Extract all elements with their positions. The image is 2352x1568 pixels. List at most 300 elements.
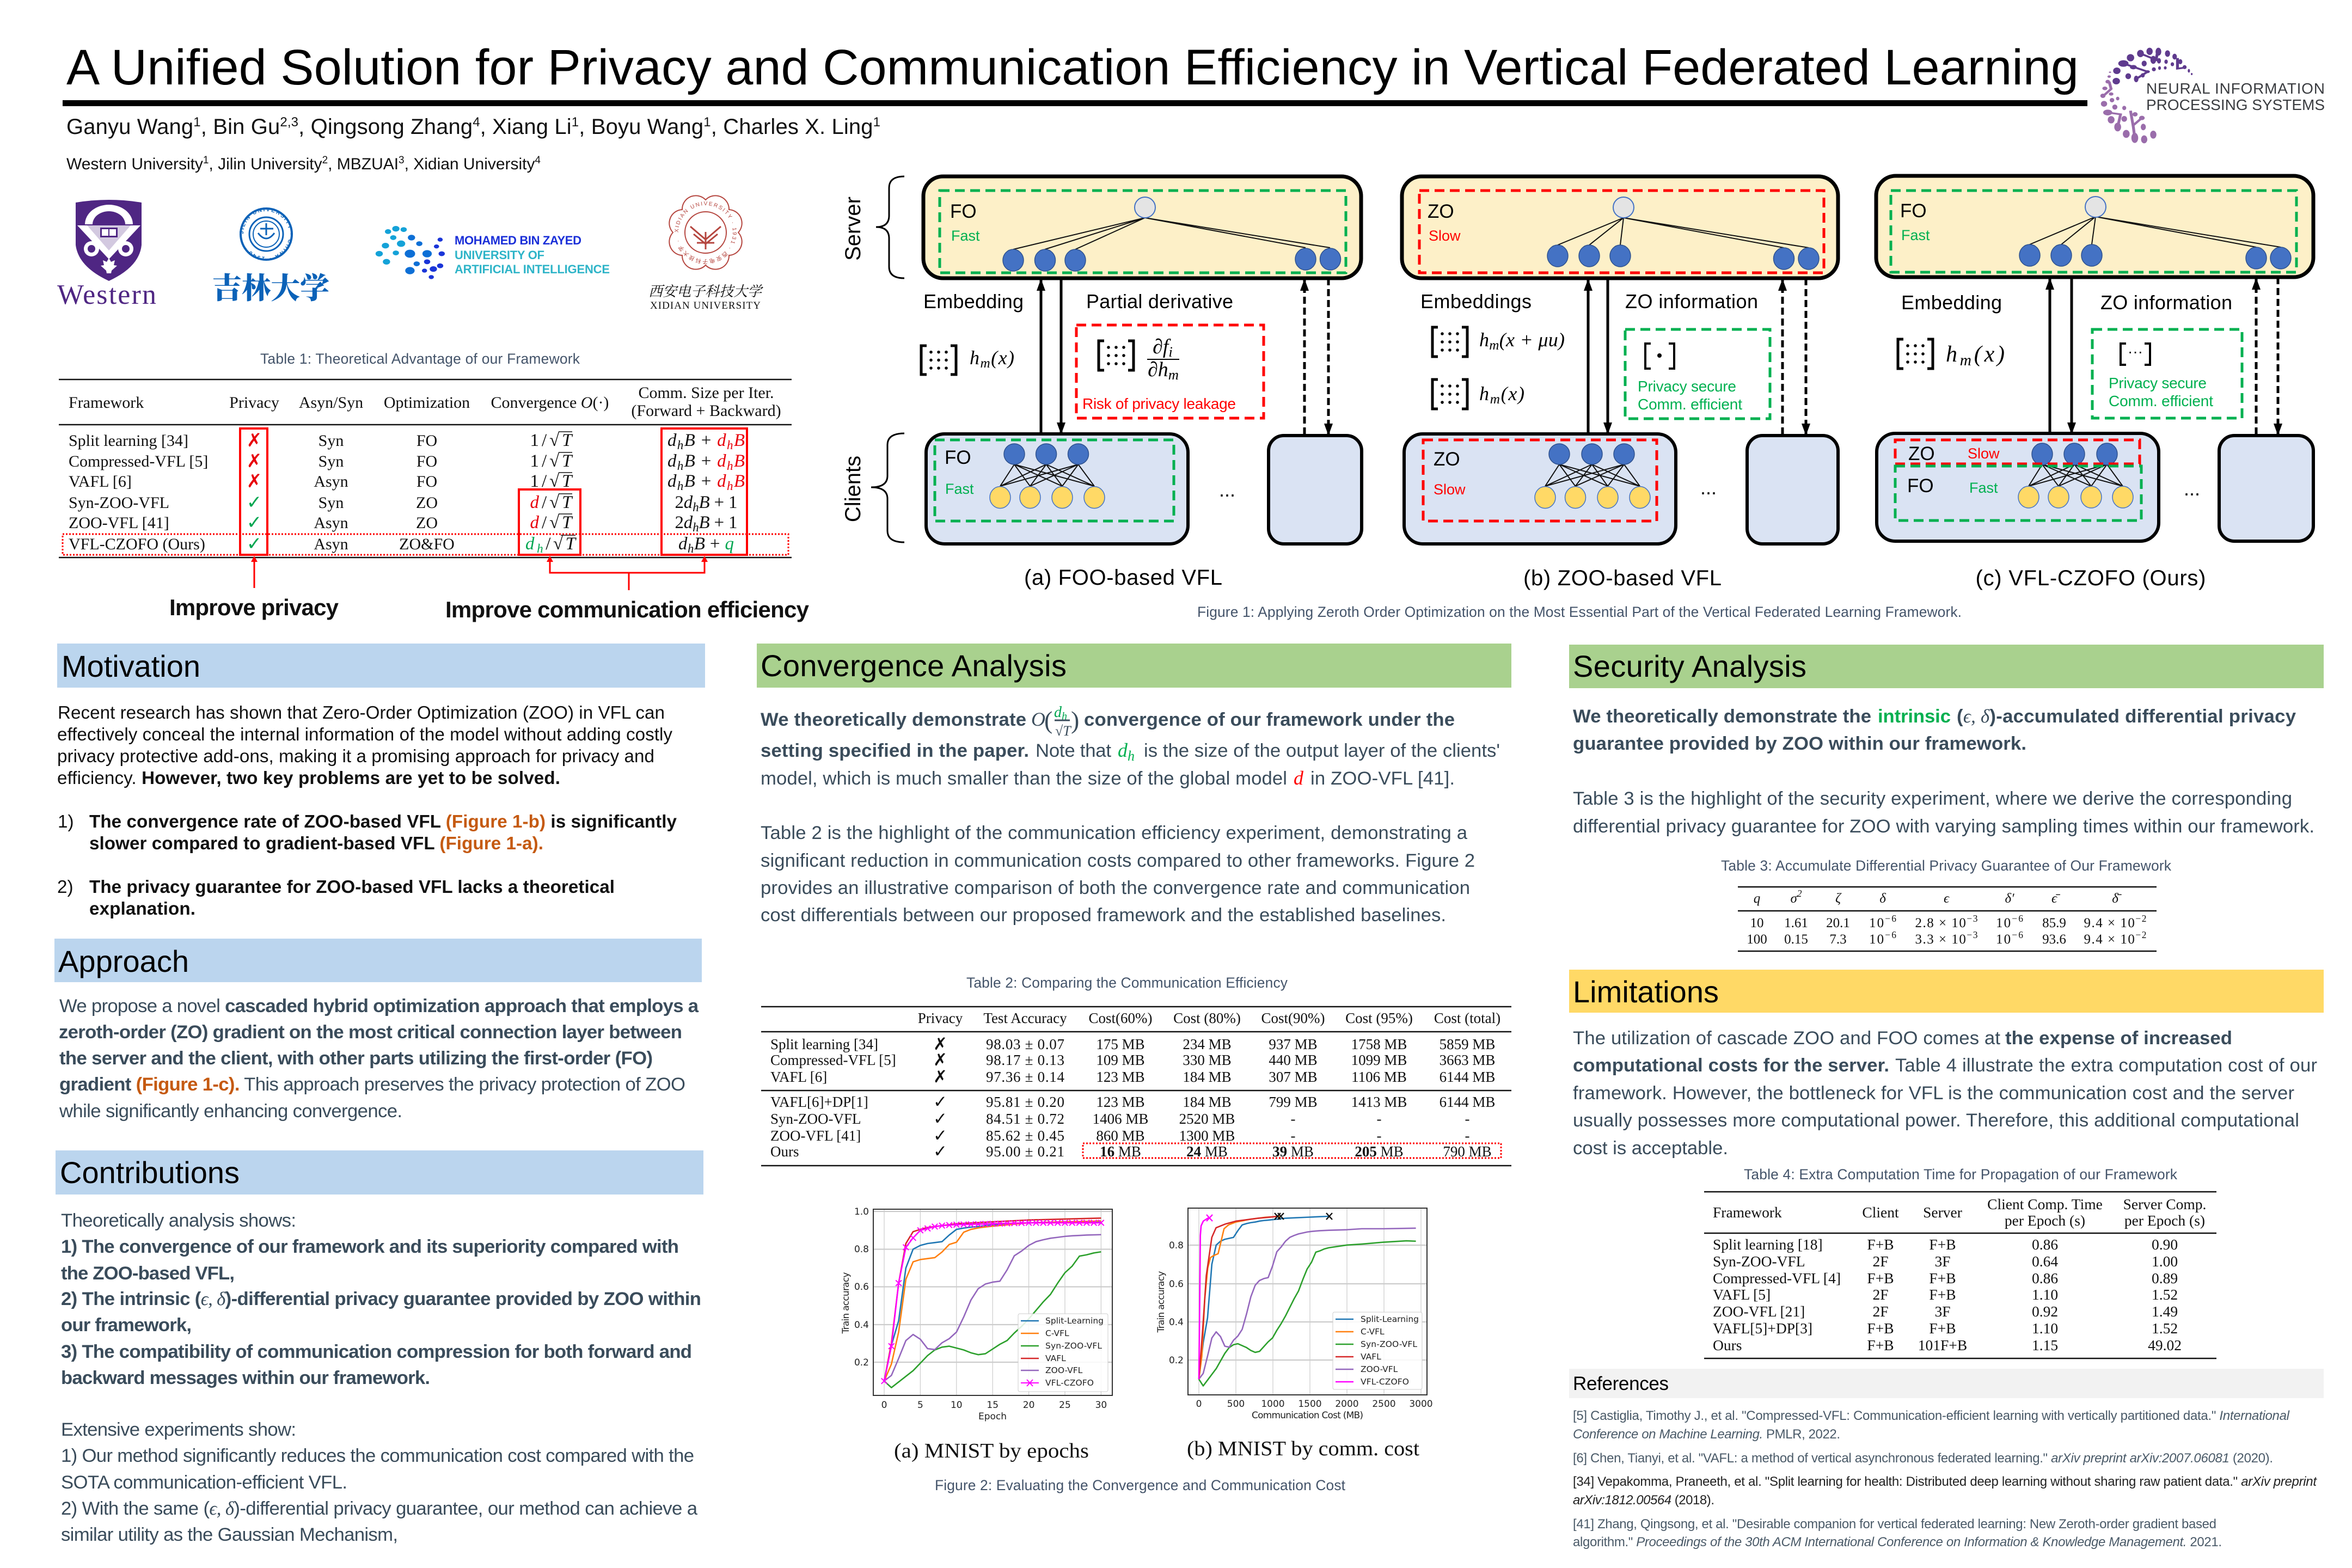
table 1 cells: Asyn bbox=[314, 535, 348, 553]
table 4 cells: per Epoch (s) bbox=[2124, 1212, 2205, 1229]
table 1 cells: B bbox=[734, 451, 745, 471]
table 2 caption: Table 2: Comparing the Communication Efficiency bbox=[966, 975, 1288, 991]
contributions text: 1) The convergence of our framework and its superiority compared with bbox=[61, 1236, 679, 1257]
diagram c: VFL-CZOFO: ZO information bbox=[2100, 291, 2232, 314]
panel: contributions bbox=[56, 1150, 703, 1545]
contributions text: the ZOO-based VFL, bbox=[61, 1263, 235, 1284]
table 1 cells: 1/√T bbox=[530, 471, 573, 491]
diagram b: ZOO-based VFL: m bbox=[1489, 338, 1499, 353]
affiliations: 1 bbox=[203, 155, 209, 166]
authors: , Qingsong Zhang bbox=[298, 115, 473, 139]
table 1 cells: Framework bbox=[69, 394, 144, 412]
diagram a: FOO-based VFL: ∂f bbox=[1153, 335, 1168, 358]
plot b axes text: 0 bbox=[1196, 1399, 1202, 1410]
embedding matrix c bbox=[1898, 339, 1933, 369]
approach text: the server and the client, with other parts utilizing the first-order (FO) bbox=[59, 1048, 653, 1069]
MBZUAI wordmark: ARTIFICIAL INTELLIGENCE bbox=[455, 262, 610, 276]
convergence statement: d bbox=[1294, 767, 1304, 789]
table 3 caption: Table 3: Accumulate Differential Privacy Guarantee of Our Framework bbox=[1721, 857, 2172, 874]
approach text: gradient (Figure 1-c). This approach preserves the privacy protection of ZOO bbox=[59, 1074, 685, 1095]
reference list: [6] Chen, Tianyi, et al. "VAFL: a method of vertical asynchronous federated learning." arXiv preprint arXiv:2007.06081 (2020). bbox=[1573, 1451, 2273, 1466]
table 2 cells: 1413 MB bbox=[1351, 1094, 1407, 1110]
plot a series bbox=[881, 1218, 1104, 1388]
chart: MNIST by communication cost bbox=[1156, 1208, 1433, 1421]
table 4 cells: 1.52 bbox=[2152, 1286, 2178, 1303]
table 1 cells: ✗ bbox=[247, 450, 262, 472]
table 4 cells: Compressed-VFL [4] bbox=[1713, 1270, 1841, 1287]
table 4 cells: Syn-ZOO-VFL bbox=[1713, 1253, 1805, 1270]
FO region a bbox=[940, 191, 1346, 273]
table 1 cells: h bbox=[693, 500, 699, 514]
table 2 cells: 2520 MB bbox=[1179, 1111, 1235, 1127]
table 1 cells: d bbox=[525, 534, 543, 555]
table 2 cells: 330 MB bbox=[1183, 1052, 1232, 1068]
convergence statement: ) bbox=[1071, 706, 1079, 734]
heading: contributions: Contributions bbox=[60, 1155, 240, 1190]
authors: 1 bbox=[193, 115, 201, 130]
plot b legend bbox=[1333, 1312, 1422, 1389]
affiliations: Western University bbox=[66, 155, 203, 173]
table 4 cells: Ours bbox=[1713, 1337, 1742, 1353]
table 1 cells: B bbox=[734, 471, 745, 491]
table 1 cells: d/√T bbox=[530, 513, 573, 532]
motivation list: 1) bbox=[58, 812, 74, 832]
plot a axes text: 10 bbox=[951, 1400, 963, 1411]
table 1 cells: ✓ bbox=[247, 512, 262, 534]
table 2 cells: 1106 MB bbox=[1351, 1069, 1407, 1085]
security statement bbox=[1573, 706, 2296, 754]
convergence statement: O bbox=[1031, 708, 1045, 730]
MBZUAI wordmark: UNIVERSITY OF bbox=[455, 248, 544, 262]
table 2: communication efficiency bbox=[761, 975, 1511, 1166]
plot b legend: ZOO-VFL bbox=[1361, 1364, 1398, 1374]
table 2 cells: 85.62 ± 0.45 bbox=[986, 1128, 1064, 1144]
diagram c: VFL-CZOFO: h bbox=[1946, 342, 1957, 367]
table 3 cells: ζ bbox=[1835, 891, 1842, 906]
arrows b bbox=[1587, 280, 1590, 433]
table 3 cells: 100 bbox=[1747, 932, 1767, 947]
diagram b: ZOO-based VFL: ZO bbox=[1434, 449, 1460, 470]
subcaption a: (a) MNIST by epochs bbox=[894, 1440, 1089, 1462]
table 2 cells: VAFL [6] bbox=[770, 1069, 827, 1085]
logo: Western University bbox=[57, 200, 156, 310]
diagram a: FOO-based VFL: m bbox=[980, 356, 990, 371]
motivation list: The convergence rate of ZOO-based VFL (Figure 1-b) is significantly bbox=[89, 812, 677, 832]
table 2 cells: 860 MB bbox=[1096, 1128, 1145, 1144]
diagram b: ZOO-based VFL: Comm. efficient bbox=[1638, 396, 1742, 413]
table 2 cells: - bbox=[1290, 1111, 1296, 1127]
diagram b: ZOO-based VFL: ZO information bbox=[1625, 290, 1758, 313]
table 4 cells: F+B bbox=[1867, 1320, 1894, 1337]
MBZUAI wordmark bbox=[455, 234, 610, 276]
table 3 cells: 10 bbox=[1996, 916, 2011, 930]
authors: , Bin Gu bbox=[201, 115, 280, 139]
table 1 cells: Syn-ZOO-VFL bbox=[69, 494, 169, 512]
table 1 cells: B bbox=[699, 513, 710, 532]
table 2 cells: 175 MB bbox=[1096, 1036, 1145, 1052]
security paragraph: Table 3 is the highlight of the security experiment, where we derive the corresponding bbox=[1573, 788, 2292, 809]
table 1 cells: Asyn bbox=[314, 473, 348, 491]
convergence statement: is the size of the output layer of the clients' bbox=[1144, 740, 1500, 761]
diagram b: ZOO-based VFL: (x) bbox=[1501, 383, 1524, 405]
table 3 cells: 10 bbox=[1869, 916, 1884, 930]
arrows a bbox=[1040, 280, 1042, 433]
table 1 cells: Syn bbox=[318, 494, 344, 512]
diagram a: FOO-based VFL bbox=[921, 176, 1362, 590]
table 2 cells: Cost(60%) bbox=[1089, 1010, 1152, 1026]
limitations text: usually possesses more computational power. Therefore, this additional computational bbox=[1573, 1110, 2299, 1131]
convergence statement: We theoretically demonstrate bbox=[761, 709, 1026, 730]
affiliations: , Xidian University bbox=[405, 155, 535, 173]
diagram c: VFL-CZOFO: ... bbox=[2184, 477, 2200, 500]
table 4 cells: VAFL[5]+DP[3] bbox=[1713, 1320, 1812, 1337]
affiliations: , MBZUAI bbox=[328, 155, 399, 173]
table 1 cells: B bbox=[694, 534, 705, 554]
logo: Xidian University: XIDIAN UNIVERSITY · 1931 · 西安电子科技大学 · bbox=[675, 201, 737, 264]
authors: 4 bbox=[473, 115, 480, 130]
table 1 cells: h bbox=[727, 438, 733, 452]
heading: security analysis: Security Analysis bbox=[1573, 649, 1806, 683]
plot b series bbox=[1199, 1213, 1416, 1386]
table 3 cells: −6 bbox=[2012, 913, 2023, 924]
diagram b: ZOO-based VFL: Embeddings bbox=[1420, 290, 1532, 313]
diagram b: ZOO-based VFL: (x + μu) bbox=[1499, 329, 1565, 351]
security statement: (ϵ, δ)-accumulated differential privacy bbox=[1957, 706, 2296, 727]
table 1 cells: 1/√T bbox=[530, 451, 573, 471]
diagram c: VFL-CZOFO: (x) bbox=[1974, 342, 2005, 367]
table 2 cells: Split learning [34] bbox=[770, 1036, 878, 1052]
table 1 cells: ZO bbox=[416, 494, 438, 512]
reference list: Conference on Machine Learning. PMLR, 2022. bbox=[1573, 1427, 1840, 1442]
table 3 cells: −6 bbox=[2012, 929, 2023, 940]
table 1 cells: Split learning [34] bbox=[69, 432, 188, 450]
table 1 cells: h bbox=[688, 541, 694, 555]
table 1 cells: FO bbox=[416, 452, 437, 470]
heading: contributions bbox=[56, 1150, 703, 1195]
plot a axes text: 0.2 bbox=[854, 1357, 869, 1368]
security statement: We theoretically demonstrate the bbox=[1573, 706, 1871, 727]
table 4 cells: 2F bbox=[1872, 1286, 1889, 1303]
table 4 cells: 1.00 bbox=[2152, 1253, 2178, 1270]
reference list: [41] Zhang, Qingsong, et al. "Desirable companion for vertical federated learning: New Zeroth-order gradient based bbox=[1573, 1517, 2216, 1532]
table 4 cells: 0.64 bbox=[2032, 1253, 2058, 1270]
approach text: We propose a novel cascaded hybrid optimization approach that employs a bbox=[59, 996, 699, 1016]
diagram b: ZOO-based VFL: h bbox=[1479, 383, 1489, 405]
logo: Jilin University: 吉林大学 bbox=[212, 265, 329, 307]
security statement: guarantee provided by ZOO within our framework. bbox=[1573, 733, 2026, 754]
table 3 cells: 9.4 × 10 bbox=[2084, 932, 2135, 947]
heading: convergence analysis: Convergence Analysis bbox=[761, 648, 1067, 683]
table 3 cells: −6 bbox=[1885, 913, 1896, 924]
plot a legend: VAFL bbox=[1045, 1353, 1066, 1363]
table 1 cells: Optimization bbox=[384, 394, 470, 412]
table 2 cells: - bbox=[1376, 1111, 1382, 1127]
panel: approach bbox=[54, 939, 702, 1122]
table 1 cells: (Forward + Backward) bbox=[631, 402, 781, 420]
table 3 cells: 85.9 bbox=[2042, 916, 2066, 930]
table 4 cells: 1.15 bbox=[2032, 1337, 2058, 1353]
diagram b: ZOO-based VFL: Slow bbox=[1434, 481, 1466, 498]
figure 2 caption: Figure 2: Evaluating the Convergence and Communication Cost bbox=[935, 1477, 1346, 1493]
table 2 cells: 95.00 ± 0.21 bbox=[986, 1143, 1064, 1160]
table 2 cells: Cost(90%) bbox=[1261, 1010, 1325, 1026]
table 1 cells: Comm. Size per Iter. bbox=[638, 384, 774, 402]
limitations text: cost is acceptable. bbox=[1573, 1138, 1728, 1159]
table 3 cells: δ bbox=[1879, 891, 1886, 906]
table 4 cells: F+B bbox=[1929, 1286, 1956, 1303]
logo: Xidian University: 西安电子科技大学 bbox=[648, 280, 763, 301]
plot b axes text: 3000 bbox=[1409, 1399, 1433, 1410]
table 2 cells: Cost (95%) bbox=[1345, 1010, 1413, 1026]
table 4 cells: F+B bbox=[1929, 1270, 1956, 1287]
plot b axes text: 0.2 bbox=[1169, 1355, 1184, 1366]
diagram b: ZOO-based VFL: m bbox=[1490, 392, 1500, 407]
plot a axes text: 5 bbox=[917, 1400, 923, 1411]
motivation intro: efficiency. However, two key problems are yet to be solved. bbox=[57, 768, 560, 788]
end markers bbox=[1275, 1213, 1332, 1220]
heading: limitations: Limitations bbox=[1573, 975, 1719, 1009]
communication efficiency paragraph: provides an illustrative comparison of both the convergence rate and communication bbox=[761, 878, 1470, 898]
limitations text: computational costs for the server. bbox=[1573, 1055, 1889, 1076]
table 2 cells: 5859 MB bbox=[1440, 1036, 1495, 1052]
plot a legend: C-VFL bbox=[1045, 1328, 1069, 1338]
table 4 cells: 49.02 bbox=[2148, 1337, 2182, 1353]
table 2 cells: 6144 MB bbox=[1440, 1069, 1495, 1085]
table 1 cells: h bbox=[727, 479, 733, 493]
table 4 cells: 3F bbox=[1934, 1253, 1951, 1270]
reference list bbox=[1573, 1408, 2317, 1549]
plot b axes text: 1000 bbox=[1261, 1399, 1285, 1410]
authors: , Boyu Wang bbox=[579, 115, 703, 139]
diagram a: FOO-based VFL: ∂h bbox=[1148, 358, 1168, 381]
table 3 cells: δ′ bbox=[2005, 891, 2014, 906]
table 1 caption: Table 1: Theoretical Advantage of our Framework bbox=[260, 351, 580, 367]
table 1 cells: d bbox=[667, 451, 695, 473]
table 1 cells: Asyn/Syn bbox=[299, 394, 363, 412]
table 3: differential privacy guarantee bbox=[1721, 857, 2172, 951]
table 2 cells: - bbox=[1465, 1111, 1470, 1127]
table 2 cells: 1758 MB bbox=[1351, 1036, 1407, 1052]
table 4 cells: 1.10 bbox=[2032, 1320, 2058, 1337]
motivation intro bbox=[57, 703, 672, 788]
table 4 cells: F+B bbox=[1929, 1320, 1956, 1337]
table 1 cells: d bbox=[667, 471, 695, 493]
motivation list bbox=[57, 812, 677, 919]
table 2 cells: 98.17 ± 0.13 bbox=[986, 1052, 1064, 1068]
table 2 rules bbox=[761, 1007, 1511, 1166]
brace: clients bbox=[871, 433, 904, 542]
table 1 cells: h bbox=[727, 458, 733, 473]
ZO info box b bbox=[1625, 329, 1770, 419]
table 3 cells: −2 bbox=[2135, 929, 2146, 940]
callout arrow: improve privacy bbox=[251, 556, 258, 588]
plot a axes text: 15 bbox=[987, 1400, 999, 1411]
table 4 cells: VAFL [5] bbox=[1713, 1286, 1771, 1303]
plot a legend: Split-Learning bbox=[1045, 1316, 1104, 1326]
diagram a: FOO-based VFL: m bbox=[1168, 366, 1179, 383]
embedding matrix a bbox=[921, 346, 956, 375]
approach text: while significantly enhancing convergence. bbox=[59, 1101, 402, 1122]
table 4 cells: 3F bbox=[1934, 1303, 1951, 1320]
table 1 cells: B bbox=[684, 431, 695, 450]
embedding matrices b bbox=[1432, 327, 1467, 357]
client box a bbox=[926, 434, 1188, 544]
table 3 cells: 10 bbox=[1750, 916, 1764, 930]
table 1 cells: B bbox=[734, 431, 745, 450]
title: A Unified Solution for Privacy and Communication Efficiency in Vertical Federated Learning bbox=[66, 40, 2079, 95]
plot b frame bbox=[1188, 1208, 1427, 1395]
logo: NeurIPS bbox=[2100, 48, 2325, 143]
callout arrow: improve communication bbox=[547, 556, 708, 590]
table 4 caption: Table 4: Extra Computation Time for Propagation of our Framework bbox=[1744, 1166, 2178, 1183]
table 1 cells: B bbox=[684, 451, 695, 471]
table 1 cells: Privacy bbox=[229, 394, 279, 412]
table 2 cells: 84.51 ± 0.72 bbox=[986, 1111, 1064, 1127]
table 4 cells: 0.86 bbox=[2032, 1270, 2058, 1287]
approach text: zeroth-order (ZO) gradient on the most critical connection layer between bbox=[59, 1022, 682, 1043]
contributions text: 3) The compatibility of communication compression for both forward and bbox=[61, 1342, 692, 1362]
plot b axes text: 0.4 bbox=[1169, 1317, 1184, 1328]
reference list: [5] Castiglia, Timothy J., et al. "Compressed-VFL: Communication-efficient learning with vertically partitioned data." International bbox=[1573, 1408, 2290, 1423]
plot b axes text: 2500 bbox=[1372, 1399, 1396, 1410]
diagram c: VFL-CZOFO bbox=[1876, 176, 2313, 590]
table 2 cells: ✗ bbox=[933, 1050, 947, 1070]
table 1 cells: + 1 bbox=[714, 513, 737, 532]
plot a legend bbox=[1018, 1314, 1108, 1392]
plot a gridlines bbox=[873, 1211, 1112, 1362]
table 2 cells: - bbox=[1465, 1128, 1470, 1144]
table 1 cells: ZOO-VFL [41] bbox=[69, 514, 169, 532]
diagram a: FOO-based VFL: Partial derivative bbox=[1086, 290, 1233, 313]
table 2 cells: ✓ bbox=[933, 1092, 947, 1112]
table 3 cells: 7.3 bbox=[1829, 932, 1847, 947]
panel: motivation bbox=[57, 644, 705, 919]
motivation list: 2) bbox=[57, 877, 74, 897]
diagram c: VFL-CZOFO: Embedding bbox=[1901, 291, 2002, 314]
heading: references: References bbox=[1573, 1373, 1669, 1394]
logo: Xidian University: XIDIAN UNIVERSITY bbox=[650, 300, 761, 311]
motivation intro: Recent research has shown that Zero-Order Optimization (ZOO) in VFL can bbox=[58, 703, 665, 723]
table 3 cells: 3.3 × 10 bbox=[1915, 932, 1966, 947]
diagram a: FOO-based VFL: FO bbox=[950, 201, 977, 222]
table 3 cells: −3 bbox=[1967, 913, 1978, 924]
table 1 cells: ✓ bbox=[247, 492, 262, 513]
table 2 cells: 1300 MB bbox=[1179, 1128, 1235, 1144]
server box b bbox=[1402, 176, 1838, 278]
table 1 cells: h bbox=[693, 520, 699, 534]
table 2 cells: Cost (80%) bbox=[1173, 1010, 1241, 1026]
communication efficiency paragraph bbox=[761, 823, 1475, 926]
affiliations: 2 bbox=[322, 155, 328, 166]
table 4 cells: 1.49 bbox=[2152, 1303, 2178, 1320]
diagram c: VFL-CZOFO: FO bbox=[1907, 475, 1934, 497]
authors: Ganyu Wang bbox=[66, 115, 193, 139]
table 1 cells: d bbox=[678, 534, 705, 555]
limitations text: the expense of increased bbox=[2005, 1028, 2232, 1049]
logo: Western University: Western bbox=[57, 279, 156, 310]
authors: 2,3 bbox=[280, 115, 298, 130]
table 4: extra computation time bbox=[1704, 1166, 2216, 1358]
contributions text: 1) Our method significantly reduces the communication cost compared with the bbox=[61, 1445, 694, 1466]
contributions text: our framework, bbox=[61, 1315, 192, 1336]
plot b gridlines bbox=[1188, 1245, 1427, 1360]
table 2 cells: Privacy bbox=[918, 1010, 963, 1026]
table 4 cells: F+B bbox=[1867, 1236, 1894, 1253]
heading: security analysis bbox=[1569, 645, 2324, 688]
convergence statement: model, which is much smaller than the size of the global model bbox=[761, 768, 1287, 789]
highlight: ours costs bbox=[1083, 1143, 1501, 1158]
table 2 cells: 98.03 ± 0.07 bbox=[986, 1036, 1064, 1052]
table 2 cells: 97.36 ± 0.14 bbox=[986, 1069, 1065, 1085]
logo wordmark: PROCESSING SYSTEMS bbox=[2146, 96, 2325, 113]
table 1 cells: + q bbox=[710, 534, 734, 554]
heading: motivation bbox=[57, 644, 705, 688]
heading: motivation: Motivation bbox=[62, 649, 200, 683]
diagram a: FOO-based VFL: (x) bbox=[991, 347, 1014, 369]
figure 1: VFL architecture bbox=[841, 176, 2313, 620]
table 1 cells: /√ bbox=[546, 534, 564, 554]
table 2 cells: 123 MB bbox=[1096, 1069, 1145, 1085]
plot a axes text: 30 bbox=[1095, 1400, 1107, 1411]
table 1 cells: B bbox=[684, 471, 695, 491]
table 3 cells: 20.1 bbox=[1826, 916, 1850, 930]
diagram b: ZOO-based VFL: ZO bbox=[1428, 201, 1454, 222]
table 1 cells: Syn bbox=[318, 432, 344, 450]
diagram c: VFL-CZOFO: FO bbox=[1900, 200, 1927, 222]
table 1 cells: ✗ bbox=[247, 430, 262, 451]
server box a bbox=[923, 176, 1361, 278]
table 1 cells: Asyn bbox=[314, 514, 348, 532]
diagram a: FOO-based VFL: i bbox=[1168, 344, 1173, 360]
table 4 cells: 101F+B bbox=[1918, 1337, 1967, 1353]
convergence statement: convergence of our framework under the bbox=[1084, 709, 1455, 730]
table 3 cells: σ bbox=[1790, 891, 1797, 906]
server box c bbox=[1876, 176, 2313, 277]
table 2 cells: 1406 MB bbox=[1093, 1111, 1148, 1127]
diagram c: VFL-CZOFO: ··· bbox=[2128, 343, 2143, 360]
panel: security analysis bbox=[1569, 645, 2324, 951]
plot a axes text: 0 bbox=[881, 1400, 887, 1411]
table 3 cells: 0.15 bbox=[1784, 932, 1808, 947]
authors: , Xiang Li bbox=[480, 115, 572, 139]
contributions text bbox=[61, 1210, 701, 1545]
security paragraph bbox=[1573, 788, 2314, 837]
table 3 rules bbox=[1738, 887, 2157, 951]
table 2 cells: 123 MB bbox=[1096, 1094, 1145, 1110]
label: Clients: Clients bbox=[841, 456, 865, 522]
table 1 cells: VAFL [6] bbox=[69, 473, 132, 491]
heading: approach bbox=[54, 939, 702, 982]
diagram b: ZOO-based VFL: (b) ZOO-based VFL bbox=[1523, 566, 1722, 590]
table 1 cells: h bbox=[677, 438, 683, 452]
table 4 cells: 1.10 bbox=[2032, 1286, 2058, 1303]
table 2 cells: ✓ bbox=[933, 1126, 947, 1146]
panel: limitations bbox=[1569, 970, 2324, 1358]
table 2 cells: 184 MB bbox=[1183, 1094, 1232, 1110]
plot b axes text: 0.6 bbox=[1169, 1279, 1184, 1290]
subcaption b: (b) MNIST by comm. cost bbox=[1187, 1437, 1419, 1460]
table 3 cells: 10 bbox=[1996, 932, 2011, 947]
table 3 cells: 2 bbox=[1797, 888, 1802, 899]
table 2 cells: Ours bbox=[770, 1143, 799, 1160]
authors: 1 bbox=[873, 115, 880, 130]
client box c bbox=[1877, 433, 2159, 541]
table 4 cells: Client bbox=[1862, 1204, 1899, 1221]
convergence statement: ( bbox=[1044, 706, 1052, 734]
highlight: communication box bbox=[661, 428, 747, 555]
table 2 cells: Compressed-VFL [5] bbox=[770, 1052, 896, 1068]
plot b axes text: 1500 bbox=[1298, 1399, 1322, 1410]
